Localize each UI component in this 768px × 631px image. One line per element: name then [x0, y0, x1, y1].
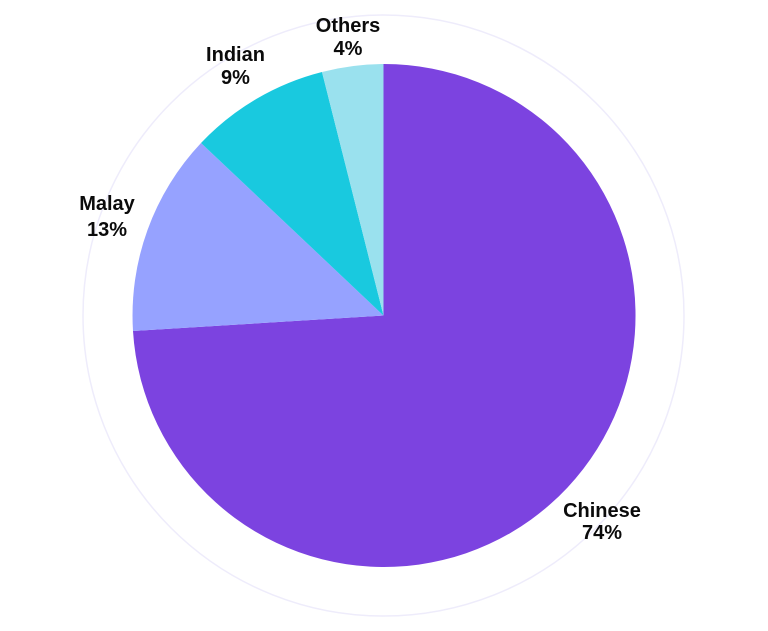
slice: Malay 13% [133, 143, 384, 331]
label: Others: 4% [334, 38, 363, 60]
label: Malay [79, 193, 136, 241]
label: Chinese: 74% [582, 522, 622, 544]
label: Malay: Malay [79, 193, 136, 215]
label: Others [316, 15, 380, 60]
slice: Chinese 74% [133, 64, 636, 567]
label: Malay: 13% [87, 219, 127, 241]
label: Chinese: Chinese [563, 500, 641, 522]
slice: Indian 9% [201, 72, 384, 316]
slice: Others 4% [322, 64, 384, 316]
label: Indian [206, 44, 265, 89]
label: Indian: 9% [221, 67, 250, 89]
outer ring [83, 15, 684, 616]
label: Others: Others [316, 15, 380, 37]
label: Indian: Indian [206, 44, 265, 66]
label: Chinese [563, 500, 641, 544]
